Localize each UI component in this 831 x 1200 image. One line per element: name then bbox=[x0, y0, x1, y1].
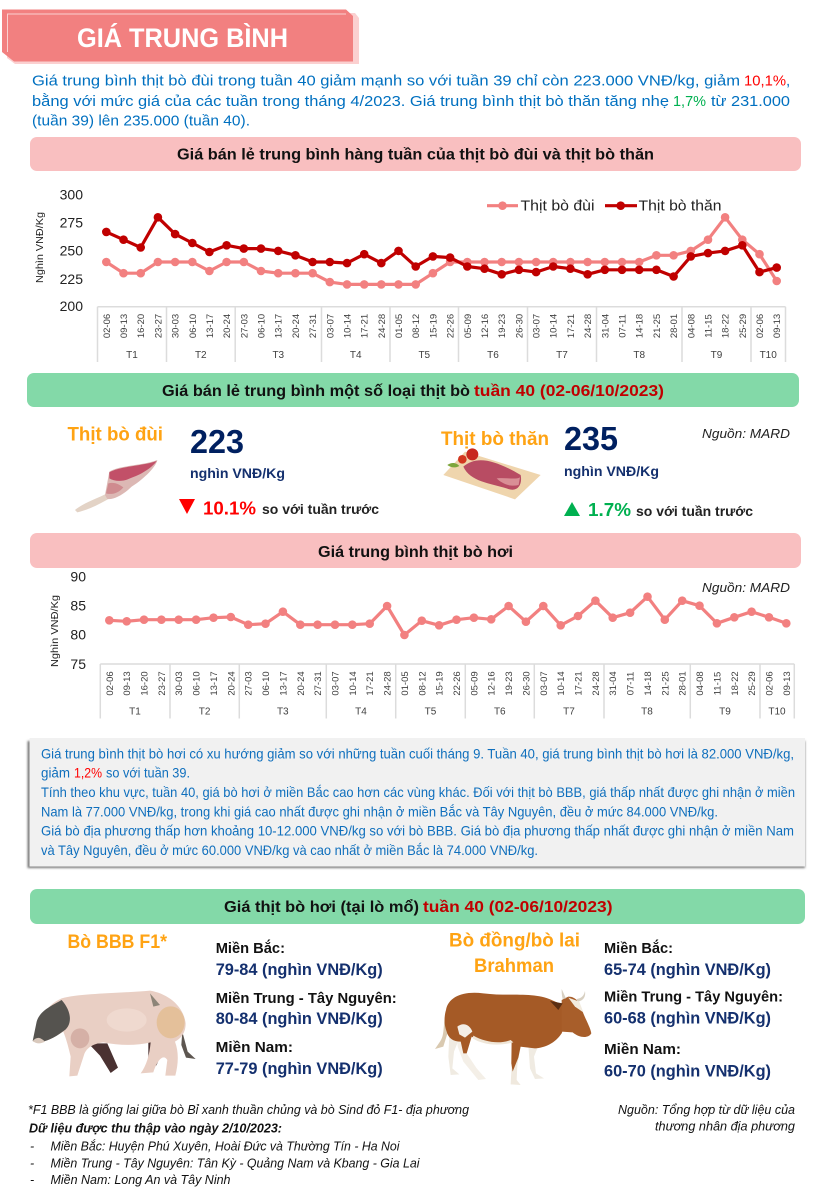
heading: week 40 retail price: Giá bán lẻ trung bình một số loại thịt bò bbox=[162, 383, 470, 400]
month labels: T10 bbox=[760, 350, 777, 361]
week labels: 21-25 bbox=[652, 314, 663, 338]
week labels: 10-14 bbox=[348, 671, 359, 696]
week labels: 24-28 bbox=[377, 314, 388, 338]
footnotes: *F1 BBB là giống lai giữa bò Bỉ xanh thuần chủng và bò Sind đỏ F1- địa phương bbox=[28, 1103, 469, 1117]
icon: up arrow bbox=[564, 502, 580, 516]
week labels: 09-13 bbox=[772, 314, 783, 338]
week labels: 28-01 bbox=[678, 671, 689, 696]
week labels: 24-28 bbox=[383, 671, 394, 696]
footnotes: - bbox=[30, 1156, 34, 1170]
footnotes: - bbox=[30, 1173, 34, 1187]
week labels: 12-16 bbox=[480, 314, 491, 338]
y axis labels: 75 bbox=[70, 656, 86, 672]
week labels: 24-28 bbox=[583, 314, 594, 338]
intro paragraph: bằng với mức giá của các tuần trong tháng 4/2023. Giá trung bình thịt bò thăn tăng nhẹ bbox=[32, 93, 669, 110]
source note: Nguồn: MARD bbox=[702, 580, 790, 595]
week labels: 18-22 bbox=[730, 671, 741, 696]
heading: live cattle price: Giá trung bình thịt bò hơi bbox=[318, 544, 513, 561]
heading: live cattle price bbox=[30, 533, 801, 568]
panel: thịt bò đùi price: Thịt bò đùi bbox=[68, 425, 163, 446]
week labels: 02-06 bbox=[105, 671, 116, 696]
week labels: 03-07 bbox=[532, 314, 543, 338]
panel: BBB F1 cattle: 77-79 (nghìn VNĐ/Kg) bbox=[216, 1060, 383, 1078]
panel: thịt bò đùi price: 10.1% bbox=[203, 498, 256, 518]
week labels: 05-09 bbox=[463, 314, 474, 338]
text box: live cattle commentary: Giá trung bình thịt bò hơi có xu hướng giảm so với những tuần cuối tháng 9. Tuần 40, giá trung bình thịt bò hơi là 82.000 VNĐ/kg, bbox=[41, 746, 794, 762]
week labels: 11-15 bbox=[704, 314, 714, 338]
month labels: T2 bbox=[195, 350, 207, 361]
month labels: T1 bbox=[129, 706, 141, 718]
week labels: 13-17 bbox=[209, 671, 220, 696]
week labels: 06-10 bbox=[256, 314, 268, 338]
week labels: 06-10 bbox=[192, 671, 203, 696]
text box: live cattle commentary bbox=[28, 738, 805, 868]
week labels: 02-06 bbox=[764, 671, 776, 696]
week labels: 06-10 bbox=[188, 314, 199, 338]
month labels: T3 bbox=[277, 706, 289, 718]
panel: local and Brahman cattle: Miền Nam: bbox=[604, 1041, 681, 1058]
week labels: 15-19 bbox=[435, 671, 446, 696]
month labels: T2 bbox=[199, 706, 211, 718]
y axis labels: 200 bbox=[60, 298, 83, 314]
y axis labels: 225 bbox=[60, 271, 83, 287]
panel: local and Brahman cattle: Brahman bbox=[474, 956, 554, 977]
week labels: 26-30 bbox=[521, 671, 532, 696]
week labels: 17-21 bbox=[566, 314, 577, 338]
week labels: 22-26 bbox=[446, 314, 457, 338]
week labels: 27-03 bbox=[244, 671, 255, 696]
y axis labels: 250 bbox=[60, 242, 83, 258]
panel: thịt bò thăn price: 235 bbox=[564, 420, 618, 457]
week labels: 24-28 bbox=[591, 671, 602, 696]
panel: thịt bò thăn price: Thịt bò thăn bbox=[441, 429, 549, 450]
week labels: 05-09 bbox=[469, 671, 480, 696]
intro paragraph: 10,1% bbox=[744, 72, 786, 90]
legend: Thịt bò thăn bbox=[638, 198, 722, 215]
week labels: 20-24 bbox=[226, 671, 237, 696]
week labels: 20-24 bbox=[222, 314, 233, 338]
line chart: retail price weekly bbox=[34, 186, 786, 362]
month labels: T6 bbox=[487, 350, 499, 361]
week labels: 04-08 bbox=[695, 671, 706, 696]
heading: week 40 retail price bbox=[27, 373, 799, 407]
panel: thịt bò đùi price bbox=[68, 423, 379, 518]
month labels: T1 bbox=[126, 350, 138, 361]
week labels: 14-18 bbox=[643, 671, 654, 696]
month labels: T10 bbox=[768, 706, 786, 718]
week labels: 12-16 bbox=[487, 671, 498, 696]
week labels: 11-15 bbox=[712, 672, 723, 695]
heading: week 40 retail price: tuần 40 (02-06/10/2023) bbox=[474, 383, 664, 400]
panel: local and Brahman cattle: Bò đồng/bò lai bbox=[449, 931, 580, 952]
week labels: 25-29 bbox=[747, 671, 758, 696]
footnotes: Miền Nam: Long An và Tây Ninh bbox=[50, 1173, 231, 1187]
week labels: 20-24 bbox=[291, 314, 302, 338]
week labels: 31-04 bbox=[608, 671, 619, 696]
heading: slaughterhouse price bbox=[30, 889, 805, 924]
icon: red cow bbox=[435, 989, 591, 1085]
week labels: 19-23 bbox=[497, 314, 508, 338]
month labels bbox=[126, 350, 777, 361]
y axis labels: 90 bbox=[70, 568, 86, 584]
week labels: 30-03 bbox=[171, 314, 182, 338]
panel: thịt bò thăn price: so với tuần trước bbox=[636, 503, 753, 519]
panel: BBB F1 cattle: Miền Nam: bbox=[216, 1039, 293, 1056]
legend: Thịt bò đùi bbox=[520, 198, 594, 215]
y axis labels: 80 bbox=[70, 626, 86, 642]
week labels: 27-31 bbox=[313, 671, 324, 696]
month labels: T8 bbox=[641, 706, 653, 718]
panel: local and Brahman cattle: Miền Bắc: bbox=[604, 939, 673, 957]
week labels: 03-07 bbox=[330, 671, 342, 696]
heading: slaughterhouse price: tuần 40 (02-06/10/2023) bbox=[423, 899, 612, 916]
source note: traders: thương nhân địa phương bbox=[655, 1120, 795, 1134]
y axis labels: 85 bbox=[70, 598, 86, 614]
week labels: 03-07 bbox=[325, 314, 336, 338]
panel: local and Brahman cattle: 60-70 (nghìn VNĐ/Kg) bbox=[604, 1063, 771, 1081]
week labels: 03-07 bbox=[539, 671, 550, 696]
week labels: 09-13 bbox=[782, 671, 793, 696]
week labels: 01-05 bbox=[394, 314, 405, 338]
panel: BBB F1 cattle: Bò BBB F1* bbox=[68, 932, 168, 953]
legend bbox=[487, 198, 722, 215]
month labels: T5 bbox=[425, 706, 437, 718]
panel: local and Brahman cattle: 65-74 (nghìn VNĐ/Kg) bbox=[604, 961, 771, 979]
week labels: 07-11 bbox=[618, 314, 628, 338]
text box: live cattle commentary: so với tuần 39. bbox=[106, 765, 190, 781]
y axis title: Nghìn VNĐ/Kg bbox=[34, 212, 46, 283]
heading: weekly retail price: Giá bán lẻ trung bình hàng tuần của thịt bò đùi và thịt bò thăn bbox=[177, 146, 654, 164]
month labels: T5 bbox=[418, 350, 431, 361]
week labels: 27-31 bbox=[308, 314, 319, 338]
week labels: 15-19 bbox=[428, 314, 439, 338]
panel: thịt bò thăn price: nghìn VNĐ/Kg bbox=[564, 463, 659, 479]
series: thịt bò thăn bbox=[106, 217, 777, 276]
intro paragraph: (tuần 39) lên 235.000 (tuần 40). bbox=[32, 112, 250, 130]
footnotes bbox=[28, 1103, 469, 1187]
week labels: 17-21 bbox=[365, 671, 376, 696]
week labels: 23-27 bbox=[153, 314, 164, 338]
week labels: 16-20 bbox=[140, 671, 150, 696]
y axis labels bbox=[70, 568, 86, 672]
week labels: 13-17 bbox=[274, 314, 285, 338]
text box: live cattle commentary: Giá bò địa phương thấp hơn khoảng 10-12.000 VNĐ/kg so với bò BBB. Giá bò địa phương thấp nhất được ghi nhận ở miền Nam bbox=[41, 823, 794, 839]
week labels: 13-17 bbox=[278, 671, 289, 696]
week labels: 08-12 bbox=[417, 671, 428, 696]
month labels: T6 bbox=[494, 706, 506, 718]
week labels: 26-30 bbox=[514, 314, 525, 338]
panel: local and Brahman cattle: 60-68 (nghìn VNĐ/Kg) bbox=[604, 1009, 771, 1027]
text box: live cattle commentary: Nam là 77.000 VNĐ/kg, trong khi giá cao nhất được ghi nhận ở miền Bắc và Tây Nguyên, đều ở mức 84.000 VNĐ/kg. bbox=[41, 804, 718, 820]
line chart: live cattle price bbox=[49, 568, 794, 718]
month labels: T7 bbox=[556, 350, 568, 361]
week labels: 04-08 bbox=[686, 314, 697, 338]
text box: live cattle commentary: và Tây Nguyên, đều ở mức 60.000 VNĐ/kg và cao nhất ở miền Bắc là 74.000 VNĐ/kg. bbox=[41, 842, 538, 858]
week labels: 01-05 bbox=[400, 671, 411, 696]
week labels: 23-27 bbox=[157, 671, 168, 696]
week labels: 17-21 bbox=[360, 314, 371, 338]
week labels: 06-10 bbox=[261, 671, 272, 696]
week labels: 18-22 bbox=[721, 314, 732, 338]
week labels: 31-04 bbox=[600, 314, 611, 338]
panel: thịt bò đùi price: so với tuần trước bbox=[262, 501, 379, 517]
week labels: 30-03 bbox=[174, 671, 185, 696]
panel: thịt bò thăn price bbox=[441, 420, 790, 520]
week labels: 27-03 bbox=[239, 314, 250, 338]
intro paragraph: , bbox=[786, 72, 790, 90]
title banner: GIÁ TRUNG BÌNH bbox=[77, 22, 288, 53]
panel: BBB F1 cattle: 79-84 (nghìn VNĐ/Kg) bbox=[216, 961, 383, 979]
panel: thịt bò thăn price: 1.7% bbox=[588, 500, 631, 520]
week labels: 10-14 bbox=[556, 671, 567, 696]
footnotes: - bbox=[30, 1140, 34, 1154]
intro paragraph: từ 231.000 bbox=[711, 93, 790, 110]
intro paragraph: 1,7% bbox=[673, 93, 706, 110]
week labels bbox=[105, 671, 793, 696]
panel: local and Brahman cattle: Miền Trung - Tây Nguyên: bbox=[604, 989, 783, 1006]
panel: thịt bò đùi price: nghìn VNĐ/Kg bbox=[190, 465, 285, 481]
footnotes: Miền Trung - Tây Nguyên: Tân Kỳ - Quảng Nam và Kbang - Gia Lai bbox=[50, 1156, 421, 1170]
week labels bbox=[102, 314, 783, 338]
y axis labels: 275 bbox=[60, 214, 83, 230]
panel: local and Brahman cattle bbox=[435, 931, 783, 1085]
month labels: T4 bbox=[355, 706, 367, 718]
month labels: T4 bbox=[350, 350, 362, 361]
intro paragraph: Giá trung bình thịt bò đùi trong tuần 40 giảm mạnh so với tuần 39 chỉ còn 223.000 VNĐ/kg, giảm bbox=[32, 72, 740, 90]
series: live cattle bbox=[109, 597, 786, 635]
week labels: 22-26 bbox=[452, 671, 463, 696]
week labels: 20-24 bbox=[296, 671, 307, 696]
week labels: 17-21 bbox=[574, 671, 584, 696]
week labels: 16-20 bbox=[136, 314, 147, 338]
icon: down arrow bbox=[179, 499, 195, 514]
week labels: 13-17 bbox=[205, 314, 216, 338]
text box: live cattle commentary: 1,2% bbox=[74, 765, 102, 781]
week labels: 02-06 bbox=[755, 314, 766, 338]
panel: BBB F1 cattle bbox=[33, 932, 397, 1078]
footnotes: Miền Bắc: Huyện Phú Xuyên, Hoài Đức và Thường Tín - Ha Noi bbox=[50, 1139, 401, 1154]
month labels: T7 bbox=[563, 706, 575, 718]
heading: slaughterhouse price: Giá thịt bò hơi (tại lò mổ) bbox=[224, 898, 419, 916]
series: thịt bò đùi bbox=[106, 217, 777, 284]
intro paragraph bbox=[32, 72, 790, 130]
text box: live cattle commentary: giảm bbox=[41, 765, 70, 781]
panel: BBB F1 cattle: Miền Trung - Tây Nguyên: bbox=[216, 990, 397, 1007]
y axis labels bbox=[60, 186, 83, 314]
icon: beef leg bbox=[75, 460, 157, 512]
month labels bbox=[129, 706, 786, 718]
week labels: 28-01 bbox=[669, 314, 680, 338]
week labels: 02-06 bbox=[102, 314, 113, 338]
week labels: 07-11 bbox=[626, 672, 637, 695]
week labels: 21-25 bbox=[660, 671, 671, 696]
y axis title: Nghìn VNĐ/Kg bbox=[49, 595, 61, 667]
week labels: 14-18 bbox=[635, 314, 646, 338]
week labels: 09-13 bbox=[119, 314, 130, 338]
source note: traders: Nguồn: Tổng hợp từ dữ liệu của bbox=[618, 1103, 795, 1117]
panel: thịt bò đùi price: 223 bbox=[190, 423, 244, 460]
month labels: T9 bbox=[711, 350, 723, 361]
heading: weekly retail price bbox=[30, 137, 801, 171]
week labels: 10-14 bbox=[549, 314, 560, 338]
icon: BBB bull bbox=[33, 991, 196, 1076]
source note: traders bbox=[618, 1103, 795, 1134]
icon: steak on board bbox=[443, 448, 541, 499]
week labels: 25-29 bbox=[738, 314, 749, 338]
panel: BBB F1 cattle: 80-84 (nghìn VNĐ/Kg) bbox=[216, 1010, 383, 1028]
panel: thịt bò thăn price: Nguồn: MARD bbox=[702, 426, 790, 441]
y axis labels: 300 bbox=[60, 186, 83, 202]
panel: BBB F1 cattle: Miền Bắc: bbox=[216, 939, 285, 957]
week labels: 19-23 bbox=[504, 671, 515, 696]
title banner bbox=[2, 10, 359, 64]
month labels: T9 bbox=[719, 706, 731, 718]
week labels: 10-14 bbox=[342, 314, 354, 338]
month labels: T8 bbox=[633, 350, 645, 361]
footnotes: Dữ liệu được thu thập vào ngày 2/10/2023: bbox=[29, 1122, 282, 1136]
week labels: 08-12 bbox=[411, 314, 422, 338]
month labels: T3 bbox=[272, 350, 285, 361]
week labels: 09-13 bbox=[122, 671, 133, 696]
